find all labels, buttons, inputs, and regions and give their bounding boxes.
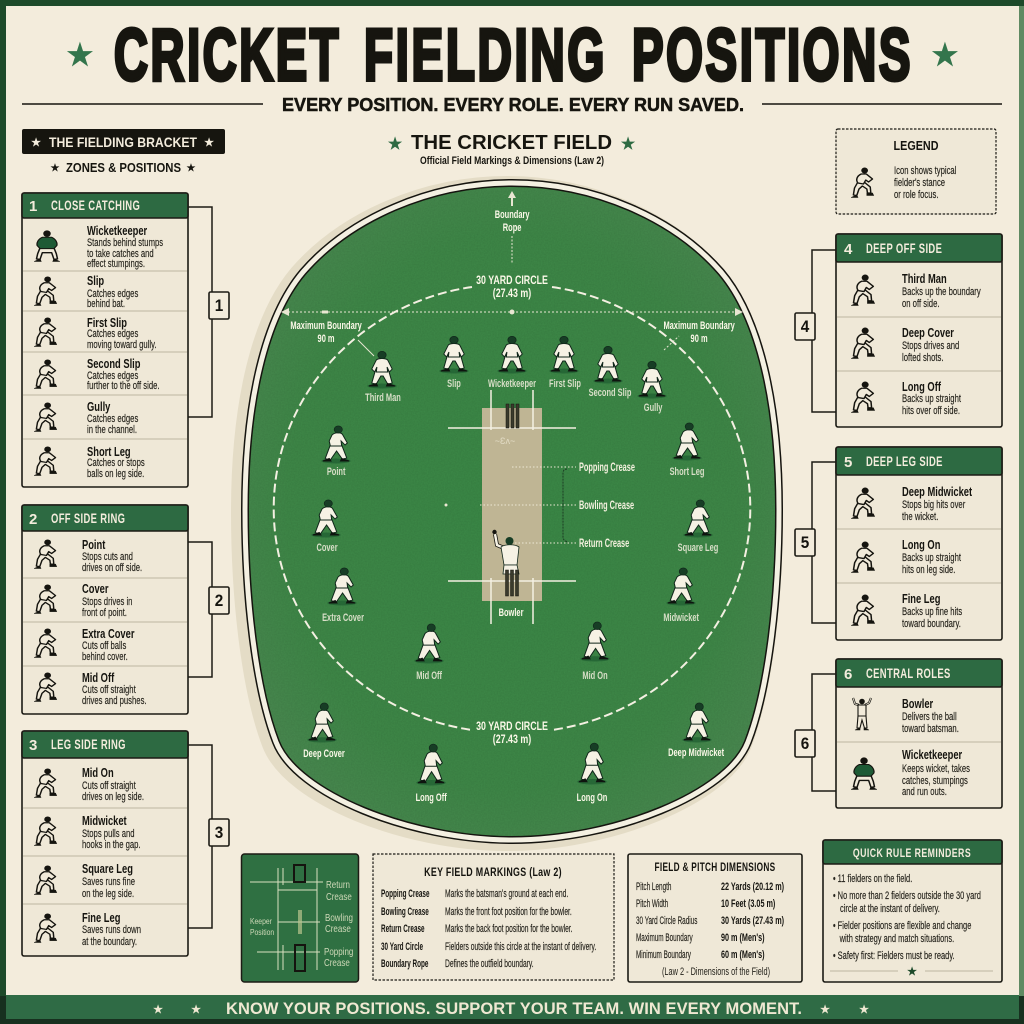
panel: close catching: Wicketkeeper — [87, 225, 148, 238]
panel: quick rule reminders: • Safety first: Fielders must be ready. — [833, 948, 955, 961]
panel: deep leg side: toward boundary. — [902, 618, 961, 630]
panel: close catching: to take catches and — [87, 248, 154, 260]
panel: mini pitch diagram: Popping — [324, 946, 353, 957]
panel: key field markings: 30 Yard Circle — [381, 940, 423, 952]
fielders — [303, 336, 725, 805]
bracket heading: ZONES & POSITIONS — [66, 160, 181, 175]
panel: field and pitch dimensions: Pitch Width — [636, 897, 668, 909]
crease callouts: Return Crease — [579, 537, 630, 551]
chart: cricket field — [240, 183, 779, 842]
panel: deep off side — [795, 234, 1002, 427]
panel: deep off side: 4 — [844, 241, 853, 258]
panel: leg side ring: Mid On — [82, 767, 114, 780]
panel: central roles: Wicketkeeper — [902, 749, 963, 762]
bracket 6: 6 — [801, 734, 809, 753]
fielder: deep midwicket — [668, 703, 725, 760]
wickets top — [506, 404, 519, 428]
panel: leg side ring: Midwicket — [82, 815, 127, 828]
panel: key field markings: Marks the batsman's ground at each end. — [445, 887, 568, 899]
panel: deep leg side: Deep Midwicket — [902, 486, 972, 499]
panel: mini pitch diagram: Return — [326, 879, 350, 890]
panel: field and pitch dimensions — [628, 854, 802, 982]
chart: cricket field: 30 YARD CIRCLE — [476, 275, 548, 287]
panel: mini pitch diagram: Crease — [326, 891, 352, 902]
panel: field and pitch dimensions: Minimum Boundary — [636, 948, 691, 960]
fielder: wicketkeeper: Wicketkeeper — [488, 378, 536, 391]
fielder: slip — [439, 336, 469, 391]
panel: close catching: Catches edges — [87, 328, 139, 340]
fielder: gully — [637, 361, 667, 415]
panel: key field markings — [373, 854, 614, 980]
heading word two: FIELDING — [364, 15, 607, 96]
panel: legend — [836, 129, 996, 214]
panel: key field markings: Bowling Crease — [381, 905, 429, 917]
panel: off side ring: Cover — [82, 583, 109, 596]
fielder: cover: Cover — [316, 542, 338, 555]
panel: field and pitch dimensions: 90 m (Men's) — [721, 932, 765, 943]
panel: quick rule reminders: • No more than 2 fielders outside the 30 yard — [833, 888, 981, 901]
field heading: ★ — [621, 136, 636, 153]
footer banner: KNOW YOUR POSITIONS. SUPPORT YOUR TEAM. WIN EVERY MOMENT. — [226, 1000, 802, 1018]
panel: legend: or role focus. — [894, 189, 938, 201]
panel: close catching: Slip — [87, 275, 104, 288]
panel: key field markings: Popping Crease — [381, 887, 430, 899]
panel: off side ring: 2 — [29, 511, 37, 528]
panel: close catching: Catches or stops — [87, 457, 145, 469]
fielder: extra cover — [322, 568, 364, 625]
30 yard circle — [274, 287, 750, 730]
panel: mini pitch diagram: Keeper — [250, 916, 272, 926]
bracket heading: ★ — [187, 163, 196, 174]
boundary labels: Boundary — [495, 209, 530, 222]
panel: deep leg side: DEEP LEG SIDE — [866, 454, 943, 469]
icon: right star: ★ — [932, 39, 959, 72]
bracket 3: 3 — [215, 823, 223, 842]
heading word one: CRICKET — [114, 15, 341, 96]
panel: off side ring: front of point. — [82, 607, 127, 619]
field heading: ★ — [388, 136, 403, 153]
panel: central roles — [795, 659, 1002, 808]
panel: key field markings: KEY FIELD MARKINGS (Law 2) — [424, 866, 562, 879]
panel: deep off side: on off side. — [902, 298, 939, 310]
panel: quick rule reminders: • 11 fielders on the field. — [833, 871, 912, 884]
panel: key field markings: Fielders outside this circle at the instant of delivery. — [445, 940, 596, 952]
field heading: THE CRICKET FIELD — [411, 132, 612, 154]
panel: off side ring: Extra Cover — [82, 628, 135, 641]
panel: key field markings: Boundary Rope — [381, 957, 428, 969]
panel: close catching: 1 — [29, 198, 37, 215]
fielder: mid on — [580, 622, 610, 683]
panel: leg side ring: Saves runs down — [82, 924, 141, 936]
panel: field and pitch dimensions: FIELD & PITCH DIMENSIONS — [655, 862, 775, 874]
footer banner: ★ — [191, 1004, 201, 1016]
fielder: midwicket: Midwicket — [663, 612, 700, 625]
panel: leg side ring: Fine Leg — [82, 912, 121, 925]
panel: deep off side: DEEP OFF SIDE — [866, 241, 942, 256]
panel: deep leg side: Stops big hits over — [902, 499, 965, 511]
panel: field and pitch dimensions: 10 Feet (3.05 m) — [721, 898, 775, 909]
panel: deep leg side: 5 — [844, 454, 852, 471]
panel: field and pitch dimensions: Maximum Boundary — [636, 931, 693, 943]
panel: close catching: in the channel. — [87, 424, 137, 436]
panel: deep off side: Deep Cover — [902, 327, 954, 340]
panel: central roles: and run outs. — [902, 786, 947, 798]
fielder: point — [321, 426, 351, 479]
fielder: short leg — [670, 423, 704, 479]
bracket heading: ★ — [51, 163, 60, 174]
panel: close catching: Catches edges — [87, 413, 139, 425]
panel: close catching: Short Leg — [87, 446, 131, 459]
fielder: first slip: First Slip — [549, 378, 581, 391]
bracket 1: 1 — [215, 296, 223, 315]
panel: central roles: Bowler — [902, 698, 934, 711]
fielder: point: Point — [327, 466, 346, 479]
panel: quick rule reminders: ★ — [907, 966, 917, 978]
footer banner: ★ — [820, 1004, 830, 1016]
bowler figure — [492, 530, 519, 574]
bracket 2 — [188, 542, 229, 677]
fielder: long on — [577, 743, 607, 805]
fielder: second slip — [589, 346, 631, 400]
panel: close catching: Stands behind stumps — [87, 237, 163, 249]
footer banner — [0, 995, 1024, 1024]
panel: central roles: 6 — [844, 666, 852, 683]
crease callouts: Bowling Crease — [579, 499, 635, 513]
panel: key field markings: Defines the outfield boundary. — [445, 957, 534, 969]
panel: leg side ring — [22, 731, 229, 956]
panel: central roles: Delivers the ball — [902, 711, 957, 723]
panel: off side ring: Point — [82, 539, 106, 552]
fielder: third man — [365, 351, 401, 405]
fielder: third man: Third Man — [365, 392, 401, 405]
chart: cricket field: Rope — [503, 222, 522, 235]
subtitle: EVERY POSITION. EVERY ROLE. EVERY RUN SAVED. — [282, 95, 744, 115]
panel: mini pitch diagram: Bowling — [325, 912, 353, 923]
panel: key field markings: Return Crease — [381, 922, 425, 934]
bracket 4 — [795, 250, 836, 412]
panel: leg side ring: Saves runs fine — [82, 876, 135, 888]
panel: central roles: CENTRAL ROLES — [866, 666, 951, 681]
panel: key field markings: Marks the front foot position for the bowler. — [445, 905, 572, 917]
bracket 3 — [188, 745, 229, 928]
pitch — [482, 408, 542, 601]
fielder: deep cover — [303, 703, 345, 761]
footer banner: ★ — [859, 1004, 869, 1016]
panel: leg side ring: on the leg side. — [82, 888, 134, 900]
panel: deep off side: Long Off — [902, 381, 941, 394]
boundary rope and grass — [245, 183, 779, 840]
panel: leg side ring: LEG SIDE RING — [51, 737, 126, 752]
fielder: gully: Gully — [644, 402, 663, 415]
bracket 2: 2 — [215, 591, 223, 610]
panel: close catching: Catches edges — [87, 288, 139, 300]
panel: legend: Icon shows typical — [894, 165, 956, 177]
panel: field and pitch dimensions: 22 Yards (20.12 m) — [721, 881, 784, 892]
fielder: square leg: Square Leg — [678, 542, 718, 555]
scribble: ~Ɛʌ~ — [495, 436, 515, 446]
panel: leg side ring: drives on leg side. — [82, 791, 144, 803]
title — [67, 15, 913, 96]
right frame edge — [1019, 6, 1024, 996]
chart: cricket field: Maximum Boundary — [663, 320, 735, 333]
crease lines — [448, 390, 576, 624]
bracket 4: 4 — [801, 317, 809, 336]
panel: off side ring: Stops drives in — [82, 596, 132, 608]
chart: cricket field: 90 m — [691, 333, 708, 346]
panel: mini pitch diagram — [242, 854, 358, 982]
fielder: mid on: Mid On — [582, 670, 608, 683]
fielder: long on: Long On — [577, 792, 607, 805]
fielder: mid off — [414, 624, 444, 683]
panel: close catching — [22, 193, 229, 487]
bracket heading: THE FIELDING BRACKET — [49, 134, 197, 150]
bracket 5: 5 — [801, 533, 809, 552]
chart: cricket field: (27.43 m) — [493, 734, 531, 746]
panel: off side ring: behind cover. — [82, 651, 128, 663]
panel: field and pitch dimensions: Pitch Length — [636, 880, 671, 892]
panel: off side ring: Stops cuts and — [82, 551, 133, 563]
panel: deep off side: lofted shots. — [902, 352, 943, 364]
panel: deep leg side: the wicket. — [902, 511, 938, 523]
panel: quick rule reminders: with strategy and match situations. — [839, 931, 954, 944]
panel: central roles: toward batsman. — [902, 723, 959, 735]
fielder: short leg: Short Leg — [670, 466, 704, 479]
panel: off side ring: Cuts off balls — [82, 640, 127, 652]
panel: close catching: Gully — [87, 401, 111, 414]
panel: legend: fielder's stance — [894, 177, 945, 189]
panel: field and pitch dimensions: 60 m (Men's) — [721, 949, 765, 960]
icon: keeper — [34, 230, 60, 261]
bracket heading: ★ — [204, 137, 214, 149]
panel: close catching: effect stumpings. — [87, 258, 145, 270]
panel: off side ring: Cuts off straight — [82, 684, 136, 696]
chart: cricket field: 90 m — [318, 333, 335, 346]
icon: left star: ★ — [67, 39, 94, 72]
field heading: Official Field Markings & Dimensions (Law 2) — [420, 155, 604, 167]
boundary arrows — [281, 191, 743, 356]
panel: close catching: CLOSE CATCHING — [51, 198, 140, 213]
panel: deep leg side: Backs up fine hits — [902, 606, 962, 618]
fielder: deep cover: Deep Cover — [303, 748, 345, 761]
panel: close catching: Catches edges — [87, 370, 139, 382]
bracket 6 — [795, 674, 836, 791]
panel: deep off side: Backs up straight — [902, 393, 961, 405]
chart: cricket field: (27.43 m) — [493, 288, 531, 300]
bracket 1 — [188, 207, 229, 417]
panel: field and pitch dimensions: 30 Yards (27.43 m) — [721, 915, 784, 926]
panel: deep off side: hits over off side. — [902, 405, 960, 417]
crease callouts — [444, 461, 635, 551]
chart: cricket field: 30 YARD CIRCLE — [476, 721, 548, 733]
wickets bottom — [506, 570, 518, 596]
panel: leg side ring: Square Leg — [82, 863, 133, 876]
fielder: mid off: Mid Off — [416, 670, 443, 683]
field halo — [240, 185, 774, 842]
panel: deep leg side: Long On — [902, 539, 940, 552]
panel: leg side ring: Stops pulls and — [82, 828, 135, 840]
panel: off side ring: drives on off side. — [82, 562, 142, 574]
field heading — [388, 132, 636, 167]
fielder: second slip: Second Slip — [589, 387, 631, 400]
panel: close catching: further to the off side. — [87, 380, 160, 392]
crease callouts: Popping Crease — [579, 461, 635, 475]
panel: off side ring: OFF SIDE RING — [51, 511, 125, 526]
grass texture — [249, 187, 775, 836]
panel: off side ring — [22, 505, 229, 714]
fielder: slip: Slip — [447, 378, 461, 391]
panel: close catching: moving toward gully. — [87, 339, 157, 351]
panel: close catching: Second Slip — [87, 358, 141, 371]
panel: off side ring: drives and pushes. — [82, 695, 147, 707]
chart: cricket field: Maximum Boundary — [290, 320, 362, 333]
panel: quick rule reminders: circle at the instant of delivery. — [840, 901, 940, 914]
panel: deep leg side: Fine Leg — [902, 593, 941, 606]
panel: close catching: balls on leg side. — [87, 468, 144, 480]
panel: central roles: catches, stumpings — [902, 775, 968, 787]
panel: deep off side: Stops drives and — [902, 340, 959, 352]
bracket heading — [22, 129, 225, 175]
fielder: long off — [416, 744, 447, 805]
fielder: midwicket — [663, 568, 700, 625]
panel: quick rule reminders — [823, 840, 1002, 982]
panel: leg side ring: at the boundary. — [82, 936, 137, 948]
panel: field and pitch dimensions: (Law 2 - Dimensions of the Field) — [662, 966, 770, 977]
bracket heading: ★ — [31, 137, 41, 149]
fielder: extra cover: Extra Cover — [322, 612, 364, 625]
panel: key field markings: Marks the back foot position for the bowler. — [445, 922, 573, 934]
bracket 5 — [795, 462, 836, 623]
panel: quick rule reminders: • Fielder positions are flexible and change — [833, 918, 971, 931]
footer banner: ★ — [153, 1004, 163, 1016]
panel: quick rule reminders: QUICK RULE REMINDERS — [853, 847, 971, 860]
panel: mini pitch diagram: Crease — [324, 957, 350, 968]
fielder: wicketkeeper — [488, 336, 536, 391]
panel: close catching: First Slip — [87, 317, 127, 330]
panel: off side ring: Mid Off — [82, 672, 114, 685]
panel: mini pitch diagram: Crease — [325, 923, 351, 934]
panel: leg side ring: 3 — [29, 737, 37, 754]
fielder: long off: Long Off — [416, 792, 447, 805]
panel: leg side ring: Cuts off straight — [82, 780, 136, 792]
panel: deep off side: Third Man — [902, 273, 947, 286]
panel: field and pitch dimensions: 30 Yard Circle Radius — [636, 914, 698, 926]
fielder: first slip — [549, 336, 581, 391]
panel: central roles: Keeps wicket, takes — [902, 763, 970, 775]
panel: deep leg side: hits on leg side. — [902, 564, 955, 576]
panel: mini pitch diagram: Position — [250, 927, 274, 937]
panel: legend: LEGEND — [894, 138, 939, 153]
bowler label: Bowler — [499, 607, 524, 620]
fielder: square leg — [678, 500, 718, 555]
fielder: cover — [311, 500, 341, 555]
panel: close catching: behind bat. — [87, 298, 125, 310]
panel: leg side ring: hooks in the gap. — [82, 839, 141, 851]
fielder: deep midwicket: Deep Midwicket — [668, 747, 725, 760]
panel: deep off side: Backs up the boundary — [902, 286, 981, 298]
panel: deep leg side — [795, 447, 1002, 640]
panel: deep leg side: Backs up straight — [902, 552, 961, 564]
